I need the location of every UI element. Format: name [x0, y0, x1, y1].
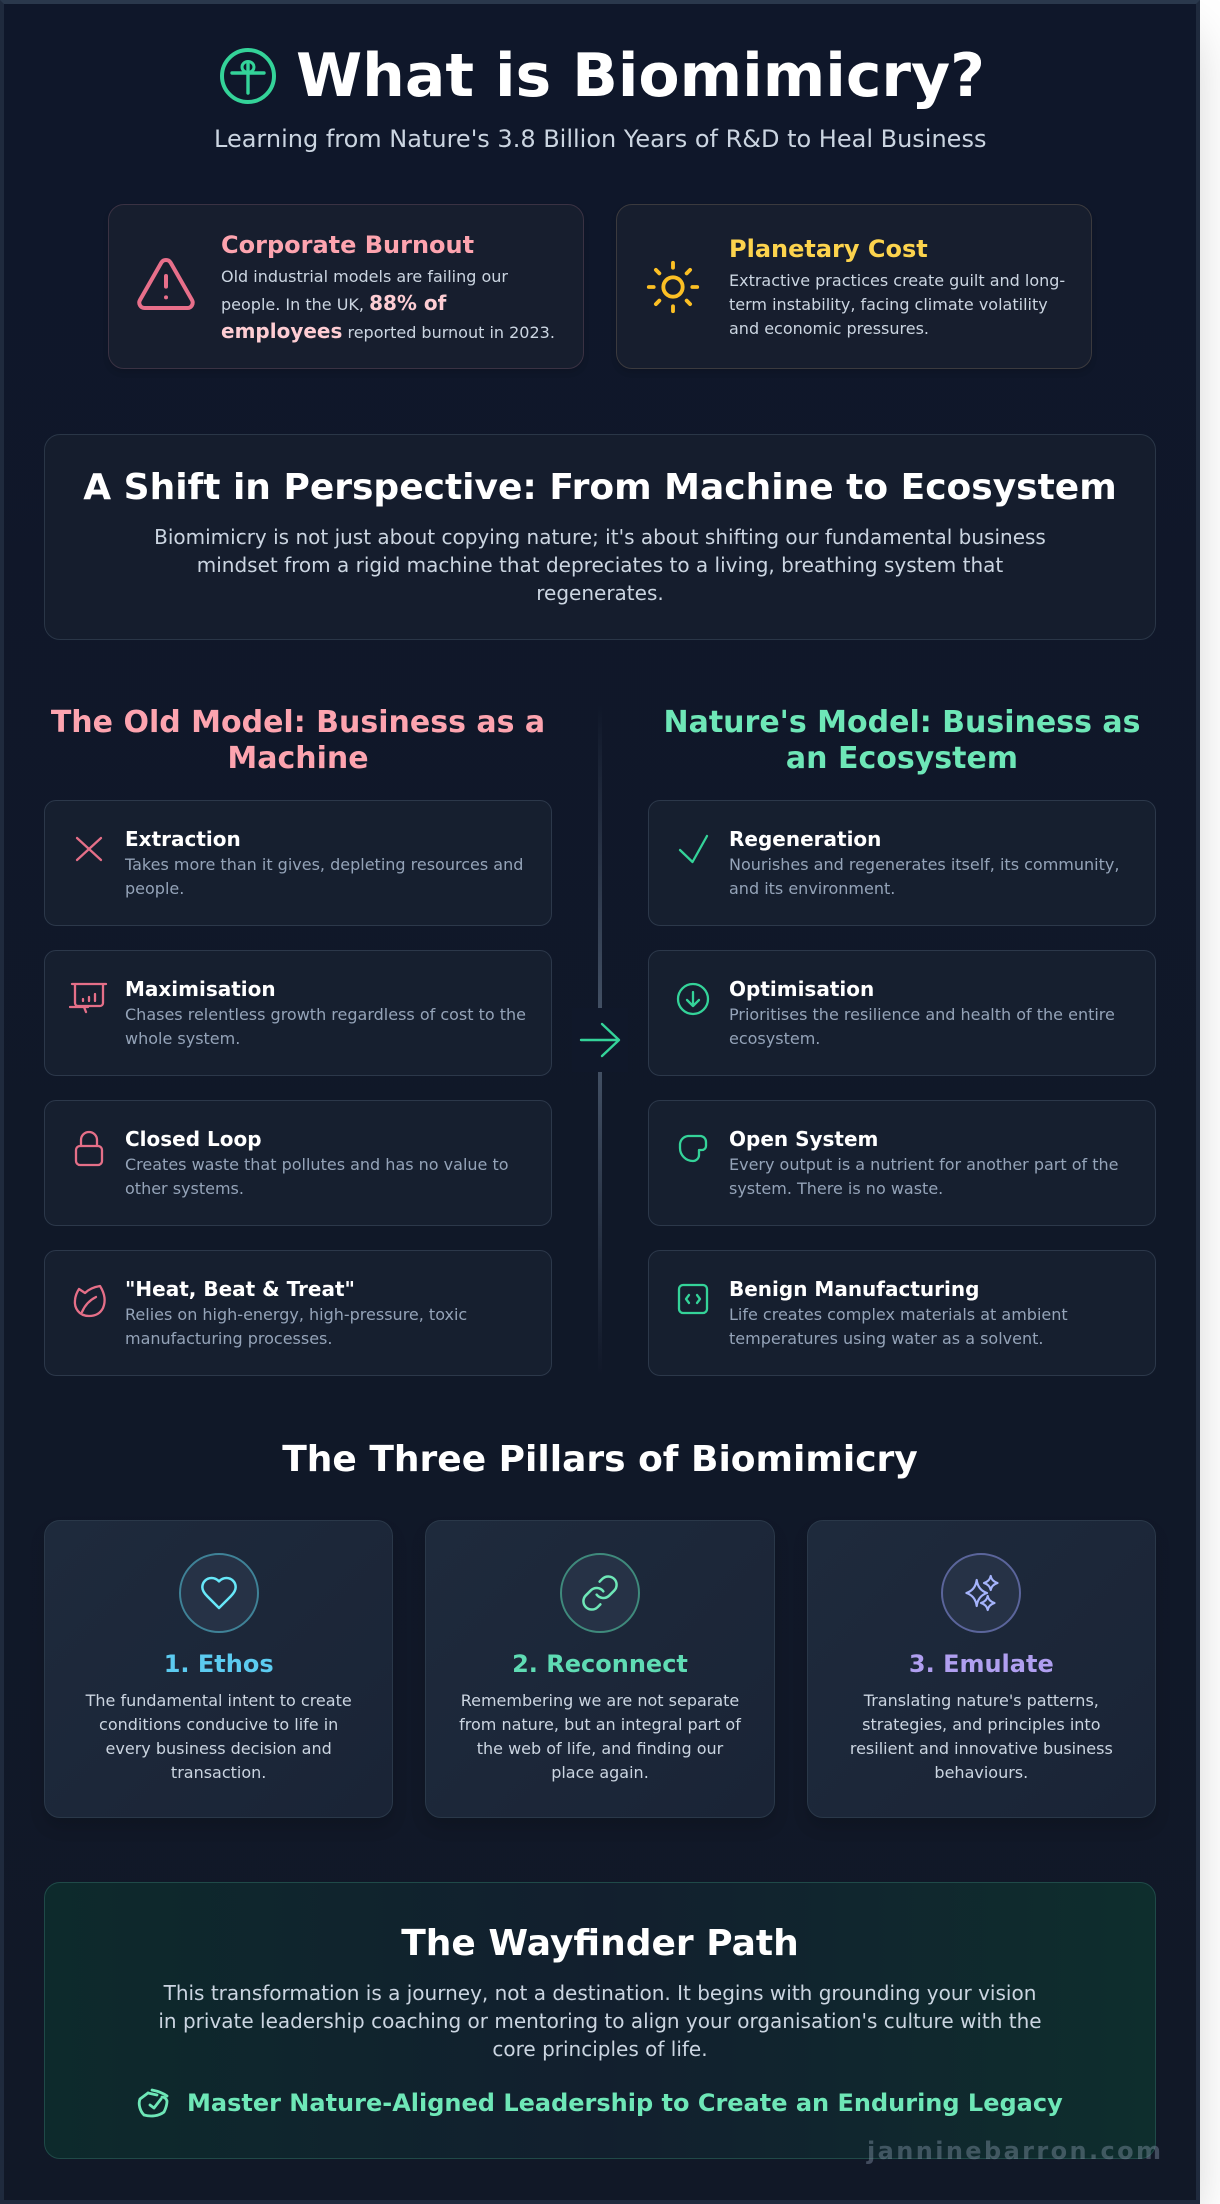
card: benign manufacturing: Life creates complex materials at ambient: [729, 1305, 1068, 1324]
card: closed loop: Closed Loop: [125, 1127, 262, 1151]
body text: [154, 525, 1046, 605]
panel: emulate: Translating nature's patterns,: [864, 1691, 1099, 1710]
card: benign manufacturing: temperatures using water as a solvent.: [729, 1329, 1043, 1348]
icon: presentation chart: [69, 982, 108, 1014]
heading: nature's model: Nature's Model: Business as: [663, 705, 1140, 740]
panel: emulate: behaviours.: [934, 1763, 1028, 1782]
body text: Extractive practices create guilt and long-: [729, 271, 1065, 290]
panel: reconnect: place again.: [551, 1763, 649, 1782]
panel: ethos: The fundamental intent to create: [86, 1691, 352, 1710]
card: heat, beat and treat: [44, 1250, 552, 1376]
title: What is Biomimicry?: [296, 41, 985, 111]
heading: The Wayfinder Path: [401, 1923, 799, 1964]
body text: [221, 267, 555, 343]
panel: reconnect: the web of life, and finding our: [477, 1739, 723, 1758]
heading: nature's model: an Ecosystem: [786, 741, 1018, 776]
card: optimisation: Optimisation: [729, 977, 874, 1001]
card: open system: Open System: [729, 1127, 878, 1151]
panel: ethos: conditions conducive to life in: [99, 1715, 338, 1734]
body text: mindset from a rigid machine that depreciates to a living, breathing system that: [197, 553, 1003, 577]
heading: nature's model: [663, 705, 1140, 776]
panel: ethos: transaction.: [171, 1763, 266, 1782]
panel: corporate burnout: [108, 204, 584, 369]
card: regeneration: and its environment.: [729, 879, 895, 898]
watermark: janninebarron.com: [867, 2137, 1163, 2165]
subtitle: Learning from Nature's 3.8 Billion Years of R&D to Heal Business: [214, 125, 986, 153]
card: heat, beat and treat: "Heat, Beat & Treat": [125, 1277, 355, 1301]
body text: employees reported burnout in 2023.: [221, 319, 555, 343]
card: closed loop: [44, 1100, 552, 1226]
icon: check: [678, 834, 708, 864]
card: optimisation: Prioritises the resilience and health of the entire: [729, 1005, 1115, 1024]
card: open system: Every output is a nutrient for another part of the: [729, 1155, 1118, 1174]
card: extraction: people.: [125, 879, 184, 898]
card: regeneration: [648, 800, 1156, 926]
card: maximisation: whole system.: [125, 1029, 240, 1048]
card: maximisation: Maximisation: [125, 977, 276, 1001]
icon: heart: [179, 1553, 259, 1633]
card: benign manufacturing: Benign Manufacturing: [729, 1277, 979, 1301]
panel: planetary cost: [616, 204, 1092, 369]
icon: sparkles: [941, 1553, 1021, 1633]
body text: regenerates.: [536, 581, 664, 605]
body text: This transformation is a journey, not a destination. It begins with grounding your vision: [164, 1981, 1036, 2005]
heading: old model: [51, 705, 545, 776]
heading: old model: The Old Model: Business as a: [51, 705, 545, 740]
body text: Biomimicry is not just about copying nature; it's about shifting our fundamental business: [154, 525, 1046, 549]
card: extraction: [44, 800, 552, 926]
body text: people. In the UK, 88% of: [221, 291, 446, 315]
heading: Corporate Burnout: [221, 231, 474, 259]
panel: emulate: [807, 1520, 1156, 1818]
icon: arrow in circle: [676, 982, 710, 1016]
panel: emulate: strategies, and principles into: [862, 1715, 1100, 1734]
header: [214, 41, 986, 153]
body text: and economic pressures.: [729, 319, 929, 338]
panel: emulate: resilient and innovative business: [850, 1739, 1113, 1758]
panel: ethos: [44, 1520, 393, 1818]
card: heat, beat and treat: manufacturing processes.: [125, 1329, 332, 1348]
body text: in private leadership coaching or mentoring to align your organisation's culture with the: [158, 2009, 1042, 2033]
body text: [158, 1981, 1042, 2061]
card: open system: [648, 1100, 1156, 1226]
card: closed loop: other systems.: [125, 1179, 244, 1198]
card: regeneration: Nourishes and regenerates itself, its community,: [729, 855, 1119, 874]
card: extraction: Extraction: [125, 827, 241, 851]
icon: code box: [678, 1284, 708, 1314]
panel: ethos: 1. Ethos: [164, 1650, 274, 1678]
icon: warning triangle: [137, 258, 195, 310]
card: optimisation: [648, 950, 1156, 1076]
panel: ethos: every business decision and: [106, 1739, 332, 1758]
card: heat, beat and treat: Relies on high-energy, high-pressure, toxic: [125, 1305, 467, 1324]
card: extraction: Takes more than it gives, depleting resources and: [125, 855, 523, 874]
heading: A Shift in Perspective: From Machine to Ecosystem: [83, 467, 1117, 508]
body text: [729, 271, 1065, 338]
card: open system: system. There is no waste.: [729, 1179, 943, 1198]
call to action: Master Nature-Aligned Leadership to Create an Enduring Legacy: [187, 2089, 1063, 2117]
icon: x: [76, 836, 102, 862]
heading: three pillars: The Three Pillars of Biomimicry: [282, 1439, 918, 1480]
heading: old model: Machine: [227, 741, 369, 776]
card: maximisation: Chases relentless growth regardless of cost to the: [125, 1005, 526, 1024]
card: optimisation: ecosystem.: [729, 1029, 820, 1048]
icon: sun: [646, 260, 700, 314]
icon: tree in circle: [220, 48, 276, 104]
icon: open blob: [678, 1134, 708, 1162]
panel: reconnect: 2. Reconnect: [512, 1650, 688, 1678]
panel: emulate: 3. Emulate: [909, 1650, 1054, 1678]
arrow: [572, 1008, 628, 1072]
panel: reconnect: [425, 1520, 775, 1818]
panel: reconnect: from nature, but an integral part of: [459, 1715, 741, 1734]
icon: lock: [74, 1130, 104, 1166]
icon: sprouting check: [138, 2088, 168, 2118]
card: benign manufacturing: [648, 1250, 1156, 1376]
card: closed loop: Creates waste that pollutes and has no value to: [125, 1155, 509, 1174]
icon: link: [560, 1553, 640, 1633]
heading: Planetary Cost: [729, 235, 928, 263]
body text: core principles of life.: [492, 2037, 708, 2061]
card: regeneration: Regeneration: [729, 827, 881, 851]
icon: leaf: [74, 1284, 106, 1318]
panel: shift in perspective: [44, 434, 1156, 640]
panel: reconnect: Remembering we are not separate: [461, 1691, 739, 1710]
body text: term instability, facing climate volatility: [729, 295, 1048, 314]
panel: wayfinder path: [44, 1882, 1156, 2159]
card: maximisation: [44, 950, 552, 1076]
body text: Old industrial models are failing our: [221, 267, 508, 286]
